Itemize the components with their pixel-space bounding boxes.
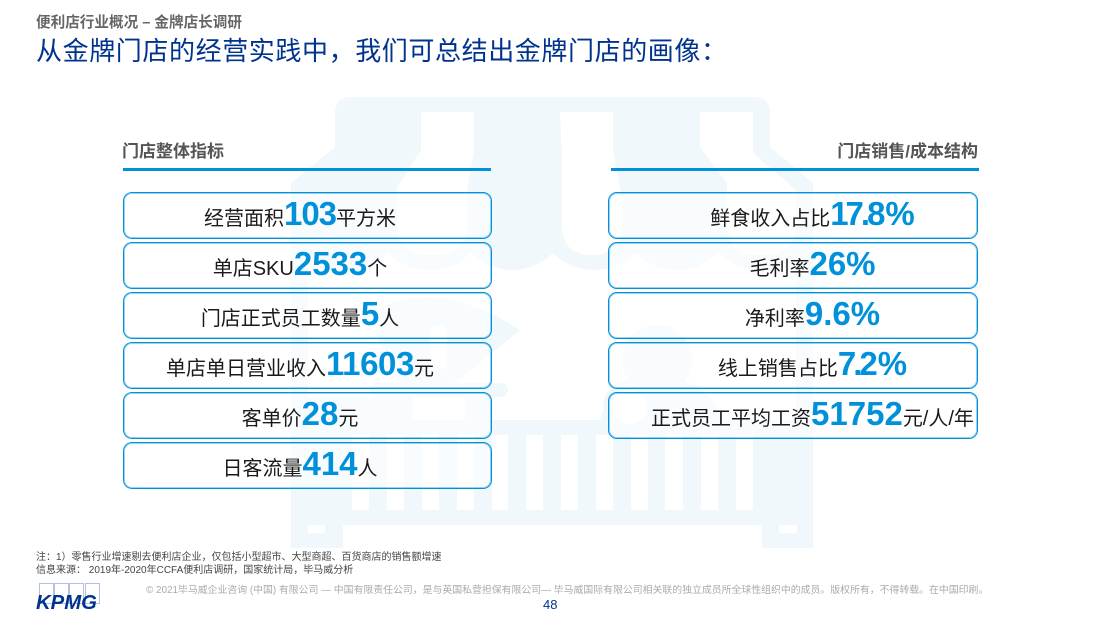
metric: SKU: 2533: [294, 245, 367, 282]
metric: staff: 5: [361, 295, 379, 332]
metric: daily revenue: 单店单日营业收入 元: [166, 358, 434, 380]
heading: overall metrics: 门店整体指标: [122, 142, 224, 161]
metric: ticket: 客单价 元: [242, 408, 358, 430]
metric: traffic: 414: [302, 445, 358, 482]
metric: online share: 线上销售占比: [718, 358, 838, 380]
metric: fresh food share: [608, 192, 978, 239]
metric list: [608, 168, 979, 439]
metric: daily revenue: 11603: [326, 345, 414, 382]
metric: ticket: 28: [302, 395, 338, 432]
metric: area: [123, 192, 492, 239]
shopper shapes: [370, 297, 520, 383]
metric: daily revenue: [123, 342, 492, 389]
metric: gross margin: 毛利率: [749, 258, 809, 280]
metric: traffic: 日客流量 人: [222, 458, 378, 480]
metric: area: 经营面积 平方米: [204, 208, 396, 230]
metric: staff: 门店正式员工数量 人: [201, 308, 399, 330]
metric: fresh food share: 17.8%: [830, 195, 915, 232]
footnotes: [36, 551, 442, 576]
footnotes: 信息来源： 2019年-2020年CCFA便利店调研，国家统计局，毕马威分析: [36, 565, 353, 576]
bottle cut-outs: [397, 112, 474, 255]
metric: net margin: [608, 292, 978, 339]
metric: wages: 51752: [811, 395, 903, 432]
copyright line: © 2021毕马威企业咨询 (中国) 有限公司 — 中国有限责任公司，是与英国私营担保有限公司— 毕马威国际有限公司相关联的独立成员所全球性组织中的成员。版权所有，不得转载。在中国印刷。: [146, 585, 988, 596]
metric: wages: 正式员工平均工资 元/人/年: [651, 408, 974, 430]
metric: net margin: 净利率: [745, 308, 805, 330]
metric: area: 103: [284, 195, 336, 232]
metric: ticket: [123, 392, 492, 439]
metric: online share: [608, 342, 978, 389]
metric: gross margin: [608, 242, 978, 289]
metric: net margin: 9.6%: [805, 295, 880, 332]
panel: store sales and cost structure: [608, 142, 979, 439]
metric: SKU: 单店SKU 个: [213, 258, 387, 280]
panel: store overall metrics: [122, 142, 492, 489]
heading: sales and cost: 门店销售/成本结构: [837, 142, 978, 161]
slots: [352, 435, 369, 510]
logo: KPMG: [36, 583, 100, 612]
metric: traffic: [123, 442, 492, 489]
metric: wages: [608, 392, 978, 439]
interior below awning: [308, 253, 796, 420]
metric: gross margin: 26%: [809, 245, 876, 282]
metric: online share: 7.2%: [838, 345, 907, 382]
metric list: [123, 168, 492, 489]
footnotes: 注：1）零售行业增速剔去便利店企业，仅包括小型超市、大型商超、百货商店的销售额增速: [36, 552, 442, 563]
title: 从金牌门店的经营实践中，我们可总结出金牌门店的画像：: [36, 36, 728, 66]
metric: staff: [123, 292, 492, 339]
section label: 便利店行业概况 – 金牌店长调研: [36, 15, 242, 31]
page number: 48: [543, 597, 557, 612]
metric: SKU: [123, 242, 492, 289]
metric: fresh food share: 鲜食收入占比: [710, 208, 830, 230]
